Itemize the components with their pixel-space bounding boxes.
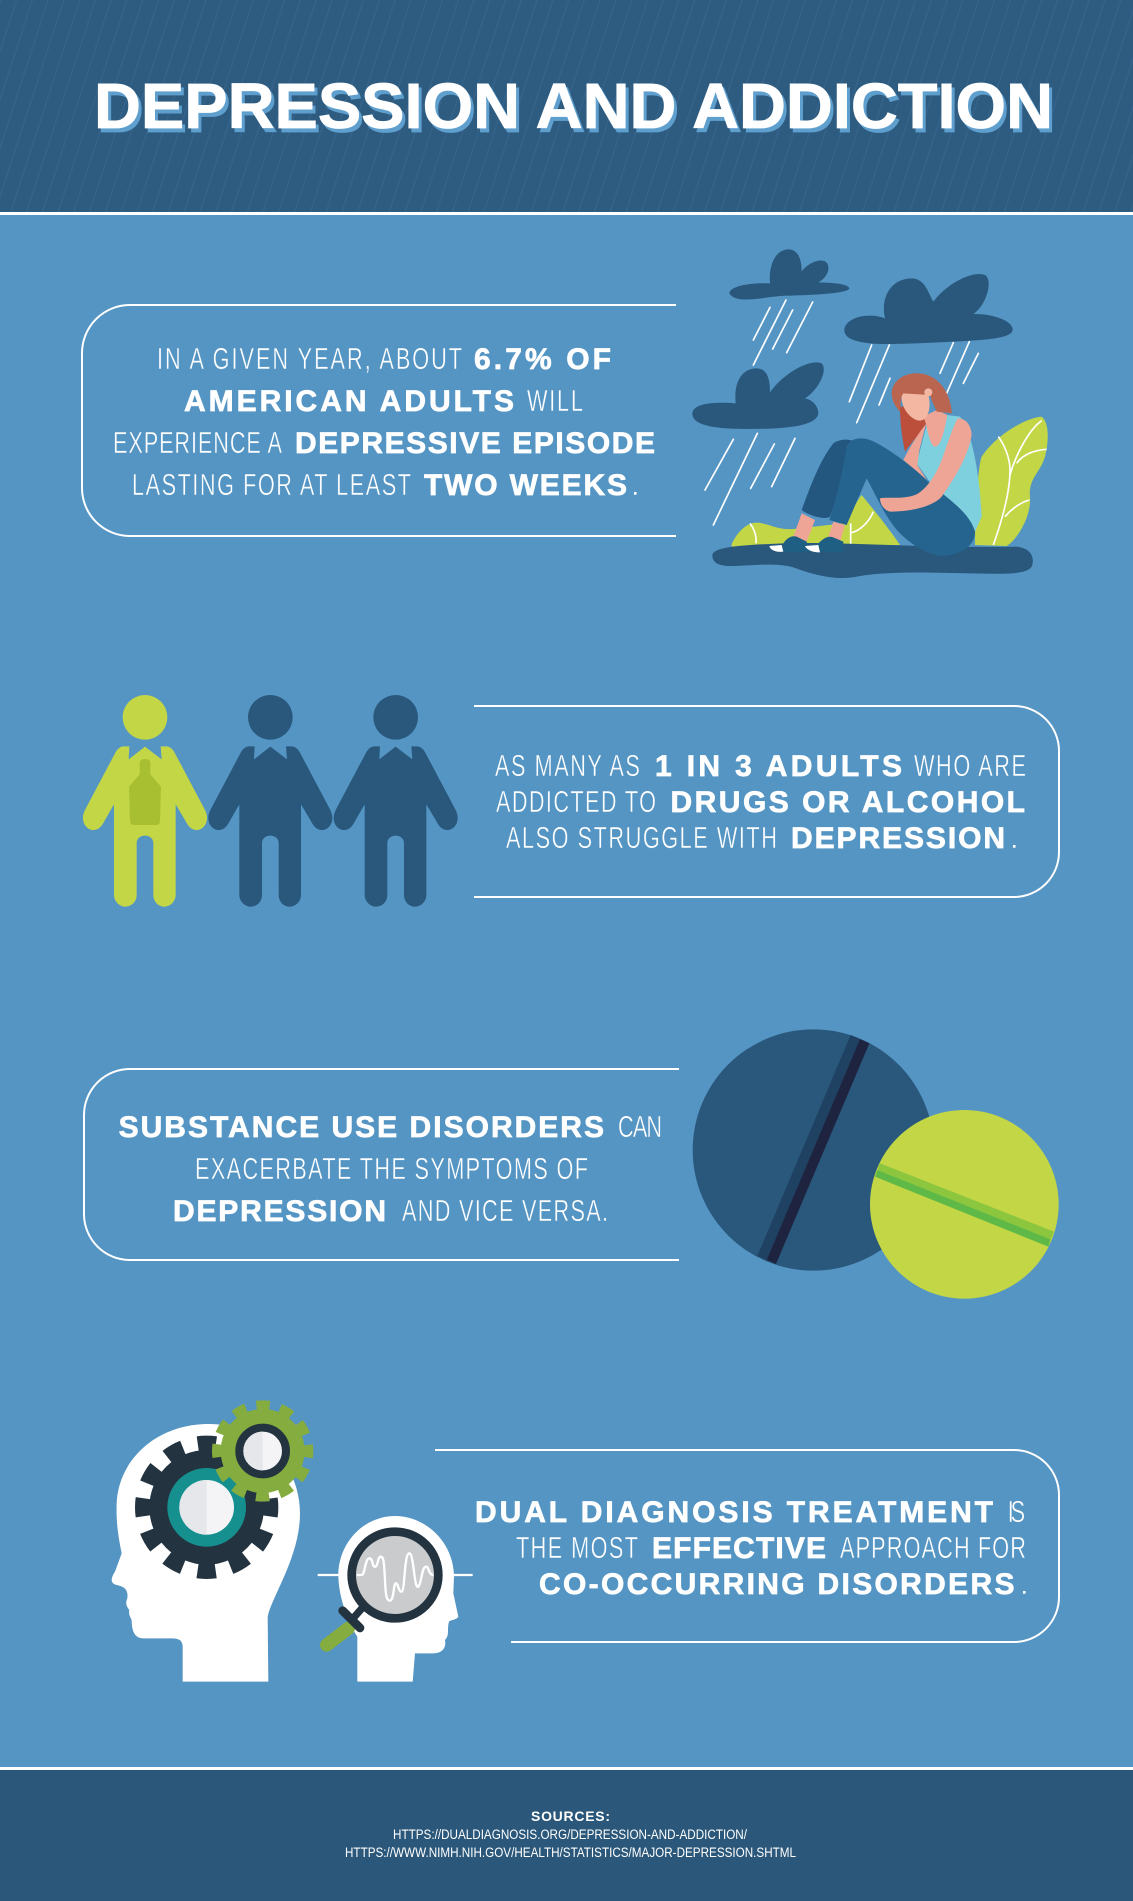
callout outline: [474, 706, 1059, 897]
text block: DEPRESSION: [791, 822, 1005, 855]
text block: 1 IN 3 ADULTS: [655, 750, 902, 783]
icon: clouds: [692, 249, 1013, 429]
text block: 6.7% OF: [474, 343, 611, 376]
header band: [0, 0, 1133, 215]
callout outline: [435, 1450, 1059, 1642]
text block: CO-OCCURRING DISORDERS: [539, 1568, 1014, 1601]
text block: EXPERIENCE A: [113, 425, 282, 460]
text block: AND VICE VERSA.: [402, 1193, 608, 1228]
icon: leaves: [732, 417, 1048, 547]
text block: [113, 341, 655, 502]
text block: AMERICAN ADULTS: [184, 385, 514, 418]
panel: dual diagnosis treatment: [435, 1450, 1059, 1642]
icon: woman: [769, 373, 982, 556]
text block: [495, 748, 1026, 855]
icon: dark pill: [693, 1029, 934, 1271]
text block: EXACERBATE THE SYMPTOMS OF: [195, 1151, 588, 1186]
illustration: heads with gears and magnifier: [112, 1405, 473, 1682]
icon: bottle: [129, 759, 161, 825]
icon: green gear: [217, 1405, 309, 1497]
sources: HTTPS://WWW.NIMH.NIH.GOV/HEALTH/STATISTICS/MAJOR-DEPRESSION.SHTML: [345, 1845, 796, 1860]
icon: large head: [112, 1424, 300, 1682]
sources: HTTPS://DUALDIAGNOSIS.ORG/DEPRESSION-AND-ADDICTION/: [393, 1827, 747, 1842]
panel: substance use disorders: [84, 1069, 679, 1260]
text block: .: [1010, 820, 1019, 855]
text block: IS: [1008, 1494, 1025, 1529]
panel: depressive episode statistic: [82, 305, 676, 536]
icon: rain: [705, 300, 978, 525]
icon: magnifier: [327, 1532, 438, 1645]
text block: DEPRESSIVE EPISODE: [295, 427, 655, 460]
text block: APPROACH FOR: [840, 1530, 1026, 1565]
text block: WILL: [527, 383, 583, 418]
text block: .: [1020, 1566, 1029, 1601]
text block: EFFECTIVE: [652, 1532, 826, 1565]
text block: AS MANY AS: [495, 748, 640, 783]
text block: DEPRESSION: [173, 1195, 386, 1228]
text block: .: [631, 467, 640, 502]
icon: person: [208, 695, 332, 907]
text block: ADDICTED TO: [496, 784, 656, 819]
panel: one in three adults: [474, 706, 1059, 897]
icon: signal line: [318, 1571, 473, 1578]
text block: LASTING FOR AT LEAST: [132, 467, 411, 502]
callout outline: [82, 305, 676, 536]
illustration: two pills: [693, 1029, 1059, 1299]
icon: person with bottle: [83, 695, 207, 907]
icon: ground: [712, 543, 1033, 578]
illustration: woman sitting under rain clouds: [692, 249, 1048, 578]
icon: green pill: [870, 1110, 1059, 1299]
sources: SOURCES:: [531, 1808, 610, 1824]
text block: IN A GIVEN YEAR, ABOUT: [157, 341, 462, 376]
sources: [345, 1808, 796, 1860]
text block: [119, 1109, 662, 1228]
title: DEPRESSION AND ADDICTION: [94, 70, 1053, 142]
callout outline: [84, 1069, 679, 1260]
text block: THE MOST: [516, 1530, 638, 1565]
text block: WHO ARE: [914, 748, 1026, 783]
icon: person: [334, 695, 458, 907]
text block: DUAL DIAGNOSIS TREATMENT: [475, 1496, 993, 1529]
text block: DRUGS OR ALCOHOL: [670, 786, 1025, 819]
illustration: three people, one in three with bottle: [83, 695, 458, 907]
text block: [475, 1494, 1029, 1601]
text block: SUBSTANCE USE DISORDERS: [119, 1111, 604, 1144]
footer band: [0, 1767, 1133, 1901]
icon: small head: [338, 1516, 458, 1682]
text block: TWO WEEKS: [424, 469, 627, 502]
text block: ALSO STRUGGLE WITH: [506, 820, 777, 855]
icon: dark gear: [143, 1444, 270, 1571]
text block: CAN: [618, 1109, 662, 1144]
